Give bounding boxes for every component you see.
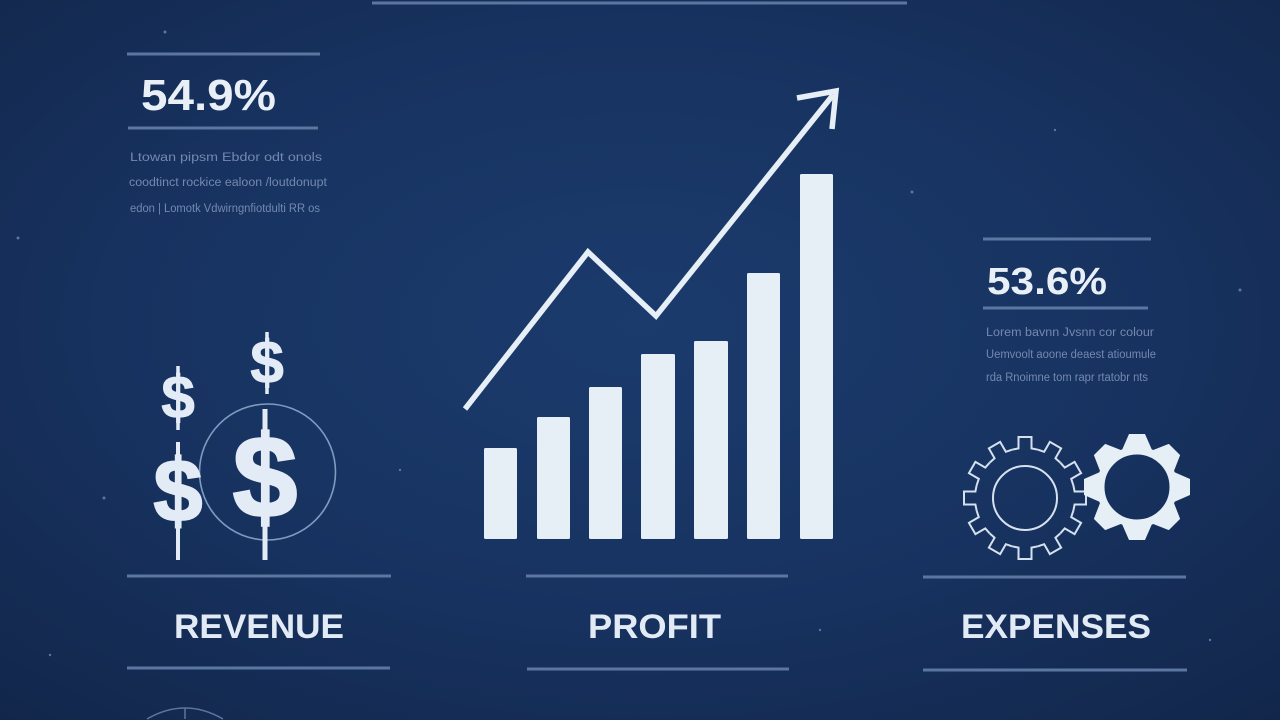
icon: dollar signs: $ [154,441,202,540]
icon: partial globe at bottom edge [147,708,223,719]
icon: dollar signs: $ [233,412,297,542]
panel: revenue stat [127,54,328,215]
revenue description [129,152,328,215]
icon: dollar signs: $ [161,364,195,431]
heading: profit: PROFIT [588,608,721,646]
arrow: upward trend [465,91,836,409]
heading: expenses: EXPENSES [961,608,1151,646]
top rule [372,2,907,4]
expenses description: rda Rnoimne tom rapr rtatobr nts [986,372,1148,384]
revenue description: Ltowan pipsm Ebdor odt onols [130,152,322,164]
heading: revenue: REVENUE [174,608,344,646]
outline gear [964,437,1086,559]
revenue description: coodtinct rockice ealoon /loutdonupt [129,177,328,189]
icon: dollar signs [154,329,336,560]
revenue description: edon | Lomotk Vdwirngnfiotdulti RR os [130,203,320,215]
circle around dollar [200,404,336,540]
icon: gears [964,434,1190,559]
expenses description: Uemvoolt aoone deaest atioumule [986,349,1156,361]
bar chart [484,174,833,539]
panel: expenses stat [983,239,1156,384]
revenue percentage: 54.9% [141,71,276,120]
expenses percentage: 53.6% [987,261,1107,303]
solid gear [1084,434,1190,540]
expenses description: Lorem bavnn Jvsnn cor colour [986,327,1154,339]
chart: profit bars and trend arrow [465,91,836,539]
icon: dollar signs: $ [250,329,284,396]
expenses description [986,327,1156,384]
